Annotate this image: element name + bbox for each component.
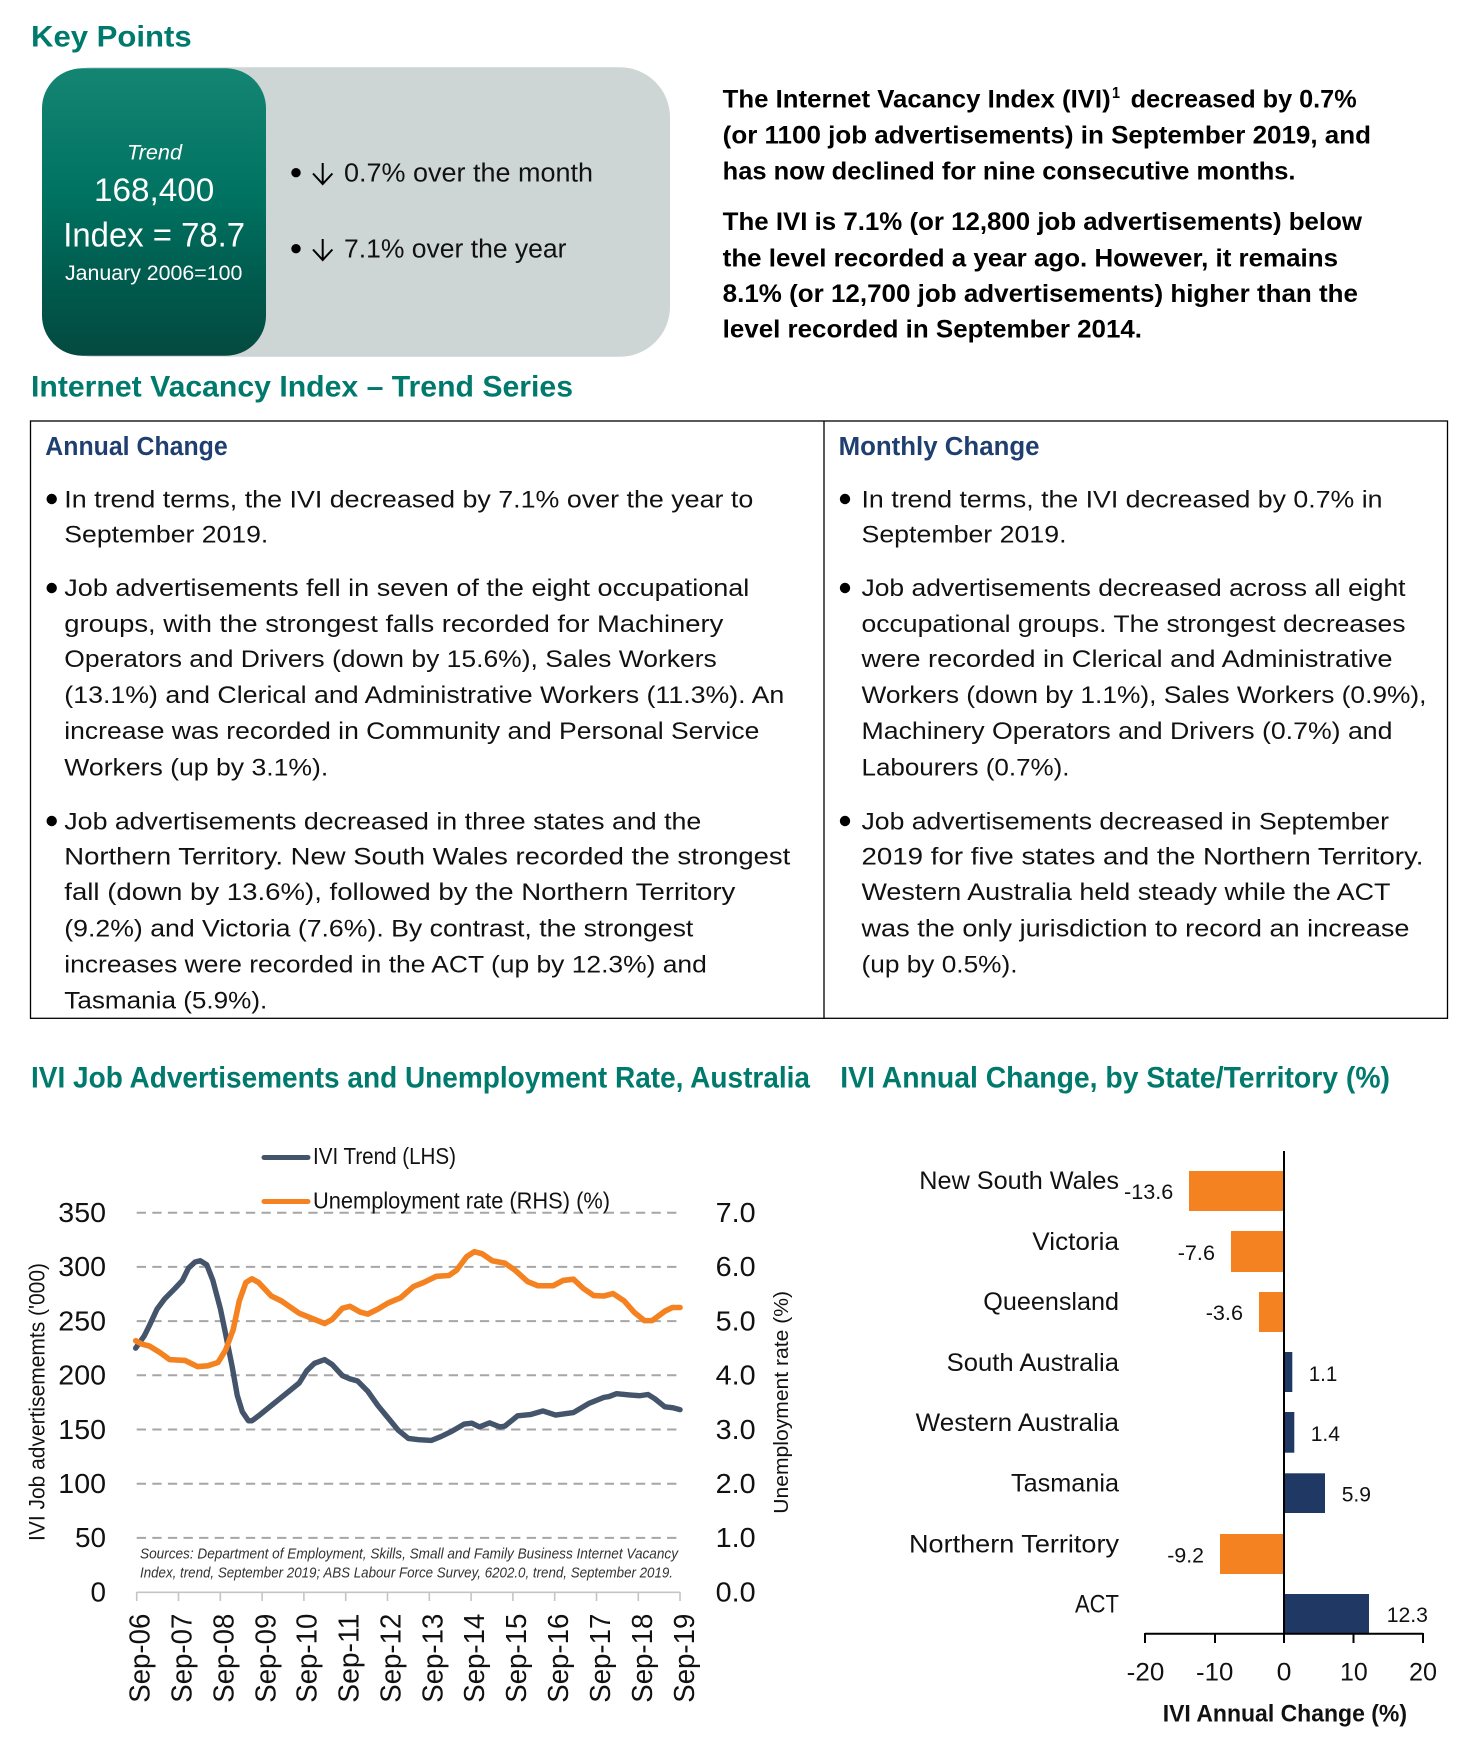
panel: trend figures: January 2006=100: [65, 261, 242, 285]
heading: Key Points: Key Points: [31, 21, 192, 54]
subheading: annual change: Annual Change: [45, 433, 228, 461]
bullet 2: were recorded in Clerical and Administrative: [860, 646, 1392, 673]
bullet 2: [840, 575, 1426, 782]
panel: trend figures: Trend: [127, 140, 183, 164]
text block: key points summary: The Internet Vacancy Index (IVI): [723, 86, 1111, 114]
bullet 2: [46, 575, 784, 782]
legend: Unemployment rate (RHS) (%): [313, 1188, 610, 1214]
text block: key points summary: 1: [1112, 85, 1120, 102]
x axis tick labels: -20: [1127, 1659, 1164, 1687]
bar chart: annual change by state and territory: [909, 1151, 1437, 1728]
bullet 2: increase was recorded in Community and Personal Service: [64, 718, 759, 745]
yearly change bullet: 7.1% over the year: [344, 236, 567, 264]
bullet 3: [840, 808, 1424, 979]
x axis title: IVI Annual Change (%): [1163, 1701, 1407, 1728]
text block: key points summary: decreased by 0.7%: [1131, 86, 1357, 114]
x axis labels: Sep-06: [124, 1614, 156, 1703]
right axis title: Unemployment rate (%): [771, 1291, 793, 1514]
x axis labels: Sep-07: [166, 1614, 198, 1703]
left axis labels: 50: [75, 1522, 106, 1553]
x axis labels: Sep-09: [250, 1614, 282, 1703]
category labels: Western Australia: [916, 1409, 1119, 1437]
x axis labels: Sep-16: [543, 1614, 575, 1703]
left axis labels: 0: [90, 1576, 106, 1608]
data labels: 1.4: [1311, 1422, 1340, 1446]
x axis labels: [124, 1614, 701, 1703]
line: IVI trend: [136, 1261, 680, 1440]
left axis labels: [58, 1197, 106, 1608]
panel: trend figures: 168,400: [94, 172, 214, 208]
bullet 3: (up by 0.5%).: [862, 952, 1018, 979]
data labels: 12.3: [1387, 1603, 1428, 1627]
bullet 3: Tasmania (5.9%).: [64, 988, 267, 1015]
legend: IVI Trend (LHS): [313, 1143, 456, 1169]
category labels: Northern Territory: [909, 1530, 1120, 1558]
panel: key figures: [42, 67, 670, 357]
right axis labels: 7.0: [716, 1197, 756, 1228]
text block: key points summary: The IVI is 7.1% (or 12,800 job advertisements) below: [723, 208, 1363, 236]
category labels: New South Wales: [919, 1167, 1119, 1195]
bullet 3: increases were recorded in the ACT (up by 12.3%) and: [64, 952, 707, 979]
subheading: monthly change: Monthly Change: [839, 433, 1040, 461]
x axis labels: Sep-19: [669, 1614, 701, 1703]
x axis labels: Sep-18: [627, 1614, 659, 1703]
panel: annual and monthly change table: [30, 421, 1448, 1018]
right axis labels: 6.0: [716, 1251, 756, 1282]
panel: trend figures: Index = 78.7: [63, 217, 245, 255]
text block: key points summary: 8.1% (or 12,700 job advertisements) higher than the: [723, 280, 1358, 308]
source note: [140, 1545, 679, 1582]
data labels: 5.9: [1342, 1483, 1371, 1507]
x axis labels: Sep-14: [459, 1614, 491, 1703]
panel background: [42, 67, 670, 357]
category labels: Tasmania: [1011, 1470, 1119, 1498]
bullet 3: [46, 808, 791, 1015]
bullet 2: occupational groups. The strongest decreases: [862, 611, 1406, 638]
bullet 2: Operators and Drivers (down by 15.6%), Sales Workers: [64, 646, 717, 673]
data labels: [1124, 1180, 1428, 1627]
x axis tick labels: -10: [1196, 1659, 1233, 1687]
right axis labels: 4.0: [716, 1360, 756, 1391]
right axis labels: 2.0: [716, 1468, 756, 1499]
source note: Sources: Department of Employment, Skills, Small and Family Business Internet Vacancy: [140, 1545, 679, 1562]
bullet 1: September 2019.: [862, 522, 1066, 549]
left axis labels: 200: [58, 1360, 106, 1391]
right axis labels: [716, 1197, 756, 1608]
right axis labels: 0.0: [716, 1576, 756, 1608]
bullet 3: Northern Territory. New South Wales recorded the strongest: [64, 843, 791, 870]
data labels: 1.1: [1309, 1362, 1337, 1386]
x axis labels: Sep-08: [208, 1614, 240, 1703]
left axis labels: 350: [58, 1197, 106, 1228]
x axis labels: Sep-17: [585, 1614, 617, 1703]
text block: key points summary: the level recorded a year ago. However, it remains: [723, 244, 1338, 272]
bullet 2: Labourers (0.7%).: [862, 754, 1070, 782]
x axis labels: Sep-13: [418, 1614, 450, 1703]
text block: key points summary: level recorded in September 2014.: [723, 316, 1142, 344]
category labels: Queensland: [983, 1288, 1119, 1316]
axes: [1145, 1151, 1423, 1643]
line chart: IVI and unemployment rate: [24, 1143, 793, 1703]
heading: line chart title: IVI Job Advertisements and Unemployment Rate, Australia: [31, 1062, 810, 1095]
right axis labels: 5.0: [716, 1305, 756, 1336]
data labels: -7.6: [1178, 1241, 1215, 1265]
bullet 1: [840, 486, 1382, 549]
bullet 3: was the only jurisdiction to record an increase: [860, 916, 1410, 943]
bullet 2: groups, with the strongest falls recorded for Machinery: [64, 611, 723, 638]
x axis tick labels: 10: [1340, 1659, 1368, 1687]
bullet 2: (13.1%) and Clerical and Administrative Workers (11.3%). An: [64, 682, 784, 709]
heading: bar chart title: IVI Annual Change, by State/Territory (%): [840, 1062, 1390, 1095]
data labels: -9.2: [1167, 1543, 1204, 1567]
x axis labels: Sep-10: [292, 1614, 324, 1703]
category labels: ACT: [1075, 1591, 1119, 1619]
left axis labels: 250: [58, 1305, 106, 1336]
panel: monthly change: [839, 433, 1426, 979]
category labels: [909, 1167, 1120, 1619]
bullet 1: September 2019.: [64, 522, 268, 549]
bullet 2: Machinery Operators and Drivers (0.7%) and: [862, 718, 1392, 745]
bullet 1: In trend terms, the IVI decreased by 0.7% in: [862, 486, 1382, 513]
bullet 3: (9.2%) and Victoria (7.6%). By contrast, the strongest: [64, 916, 694, 943]
x axis labels: Sep-11: [334, 1614, 366, 1703]
left axis title: IVI Job advertisememts ('000): [24, 1263, 49, 1541]
category labels: Victoria: [1032, 1228, 1119, 1256]
source note: Index, trend, September 2019; ABS Labour Force Survey, 6202.0, trend, September 2019.: [140, 1565, 673, 1582]
heading: Internet Vacancy Index trend series: Internet Vacancy Index – Trend Series: [31, 371, 573, 404]
bullet 2: Workers (up by 3.1%).: [64, 754, 328, 782]
x axis tick labels: 20: [1409, 1659, 1437, 1687]
x axis labels: Sep-12: [376, 1614, 408, 1703]
text block: key points summary: [723, 85, 1371, 344]
text block: key points summary: (or 1100 job advertisements) in September 2019, and: [723, 122, 1371, 150]
bullet 3: Job advertisements decreased in three states and the: [64, 808, 701, 835]
text block: key points summary: has now declined for nine consecutive months.: [723, 158, 1296, 186]
left axis labels: 100: [58, 1468, 106, 1499]
bullet 3: fall (down by 13.6%), followed by the Northern Territory: [64, 879, 735, 906]
right axis labels: 3.0: [716, 1414, 756, 1445]
bullet 3: Western Australia held steady while the ACT: [862, 879, 1391, 906]
bullet 3: 2019 for five states and the Northern Territory.: [862, 843, 1424, 870]
bullet 2: Job advertisements decreased across all eight: [862, 575, 1406, 602]
left axis labels: 150: [58, 1414, 106, 1445]
data labels: -13.6: [1124, 1180, 1173, 1204]
data labels: -3.6: [1206, 1301, 1243, 1325]
x axis labels: Sep-15: [501, 1614, 533, 1703]
legend: [264, 1143, 610, 1214]
x axis tick labels: [1127, 1659, 1437, 1687]
left axis labels: 300: [58, 1251, 106, 1282]
category labels: South Australia: [947, 1349, 1119, 1377]
panel: annual change: [45, 433, 791, 1015]
bullet 3: Job advertisements decreased in September: [862, 808, 1389, 835]
line: unemployment rate: [136, 1252, 680, 1367]
bullet 1: [46, 486, 753, 549]
right axis labels: 1.0: [716, 1522, 756, 1553]
bullet 2: Workers (down by 1.1%), Sales Workers (0.9%),: [862, 682, 1426, 709]
x axis tick labels: 0: [1277, 1659, 1292, 1687]
bullet 1: In trend terms, the IVI decreased by 7.1% over the year to: [64, 486, 753, 513]
bullet 2: Job advertisements fell in seven of the eight occupational: [64, 575, 749, 602]
monthly change bullet: 0.7% over the month: [344, 160, 593, 188]
panel: trend figures: [42, 68, 266, 356]
bars: [1189, 1171, 1369, 1634]
